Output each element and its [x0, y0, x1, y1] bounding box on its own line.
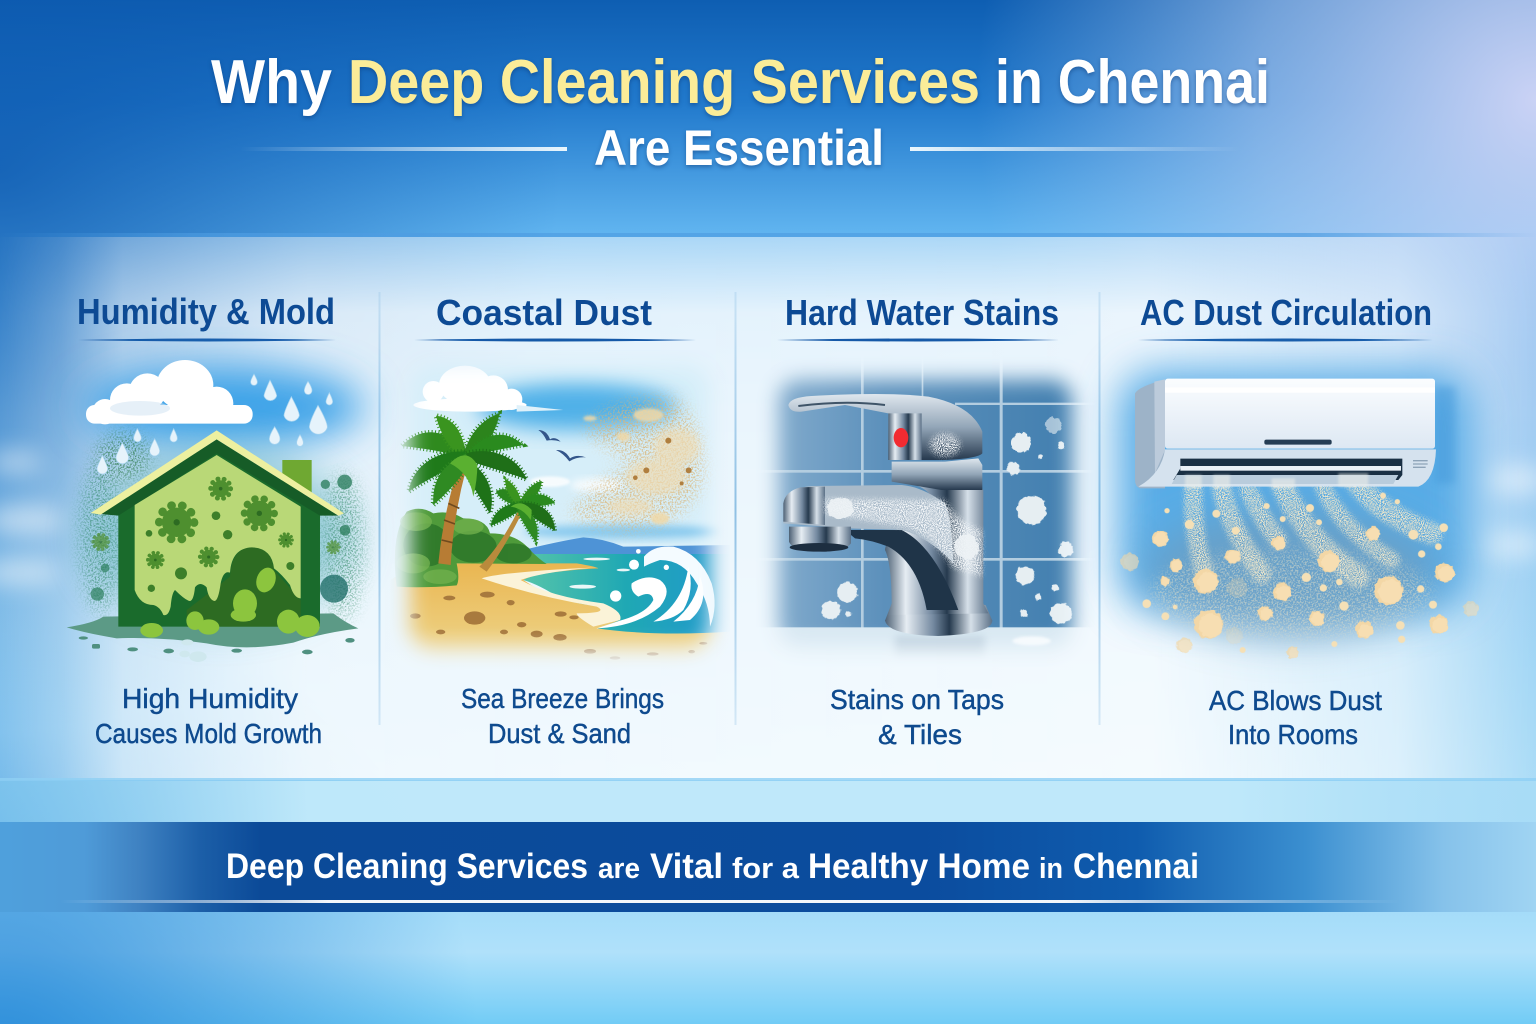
bottom banner — [0, 822, 1536, 912]
caption: High Humidity Causes Mold Growth — [95, 683, 322, 749]
banner text — [226, 847, 1199, 886]
panel: hard water stains — [745, 292, 1095, 750]
panel: humidity and mold — [67, 291, 363, 749]
main content panel — [0, 233, 1536, 780]
caption: High Humidity Causes Mold Growth: Causes Mold Growth — [95, 718, 322, 749]
banner text: Vital — [650, 847, 723, 886]
caption: Sea Breeze Brings Dust & Sand: Dust & Sand — [488, 718, 631, 749]
banner text: for a — [732, 853, 800, 885]
column dividers — [378, 292, 1100, 725]
icon: beach with sand dust — [390, 350, 730, 670]
strip below panel — [0, 778, 1536, 822]
caption: AC Blows Dust Into Rooms: AC Blows Dust — [1209, 685, 1382, 716]
caption: Stains on Taps & Tiles: & Tiles — [878, 719, 962, 750]
icon: air conditioner blowing dust — [1118, 370, 1478, 659]
panel: coastal dust — [390, 292, 730, 749]
air streams — [1193, 480, 1432, 577]
title: Why — [211, 48, 332, 117]
caption: Sea Breeze Brings Dust & Sand: Sea Breeze Brings — [461, 683, 664, 714]
banner text: in — [1039, 853, 1063, 885]
icon: faucet with limescale — [745, 350, 1095, 667]
caption: High Humidity Causes Mold Growth: High Humidity — [122, 683, 298, 714]
caption: Stains on Taps & Tiles: Stains on Taps — [830, 684, 1004, 715]
banner text: Healthy Home — [808, 847, 1030, 886]
subtitle: Are Essential: Are Essential — [594, 120, 884, 176]
subtitle: Are Essential — [240, 120, 1240, 176]
heading: Hard Water Stains: Hard Water Stains — [785, 292, 1059, 333]
banner text: Chennai — [1073, 847, 1199, 886]
title: in Chennai — [995, 48, 1270, 117]
caption: AC Blows Dust Into Rooms — [1209, 685, 1382, 750]
title — [211, 48, 1270, 117]
heading: Coastal Dust — [414, 292, 696, 342]
banner text: are — [598, 853, 640, 885]
banner text: Deep Cleaning Services — [226, 847, 588, 886]
heading: AC Dust Circulation: AC Dust Circulation — [1140, 292, 1432, 333]
caption: Sea Breeze Brings Dust & Sand — [461, 683, 664, 749]
heading: Coastal Dust: Coastal Dust — [436, 292, 652, 333]
icon: house with mold — [67, 360, 363, 662]
caption: AC Blows Dust Into Rooms: Into Rooms — [1228, 719, 1358, 750]
panel: AC dust circulation — [1118, 292, 1478, 750]
caption: Stains on Taps & Tiles — [830, 684, 1004, 750]
heading: Humidity & Mold: Humidity & Mold — [77, 291, 335, 332]
title: Deep Cleaning Services — [348, 48, 980, 117]
